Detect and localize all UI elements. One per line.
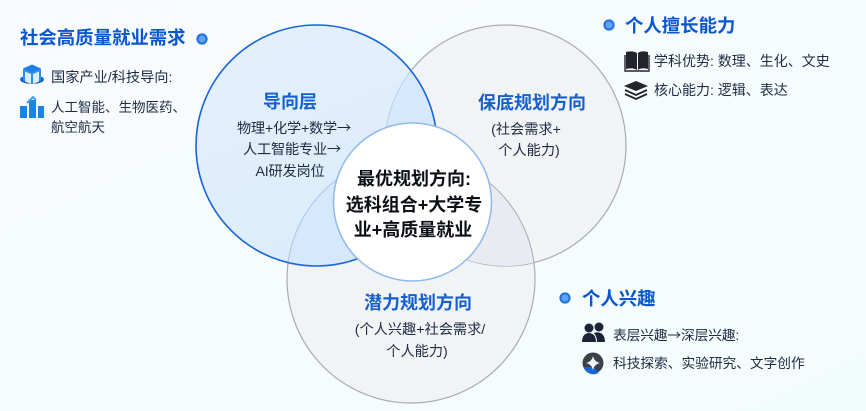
text: core abilities: 核心能力: 逻辑、表达 (654, 82, 788, 98)
text: interest areas: 科技探索、实验研究、文字创作 (613, 356, 805, 371)
heading: fallback direction: 保底规划方向 (478, 92, 586, 113)
bullet dot (604, 20, 614, 30)
text: potential direction formula: (个人兴趣+社会需求/ (355, 322, 485, 338)
text: industries: 人工智能、生物医药、 (51, 100, 186, 115)
left circle text (237, 92, 351, 180)
circle: right fallback direction (385, 25, 626, 266)
icon: stacked books (624, 81, 648, 99)
panel: personal interests (560, 288, 805, 374)
bottom circle text (355, 292, 485, 360)
icon: people (582, 322, 605, 342)
center circle text: 最优规划方向: (357, 168, 471, 189)
text: guidance layer path: 物理+化学+数学→ (237, 118, 351, 138)
heading: guidance layer: 导向层 (263, 92, 317, 112)
venn diagram (196, 25, 626, 403)
text: guidance layer path: AI研发岗位 (256, 164, 324, 180)
text: potential direction formula: 个人能力) (386, 344, 448, 360)
right circle text (478, 92, 586, 159)
text: fallback direction formula (491, 122, 561, 159)
heading: social demand: 社会高质量就业需求 (20, 27, 186, 48)
overlap: bottom and right (467, 182, 534, 266)
text: interest deepening: 表层兴趣→深层兴趣: (613, 324, 739, 344)
bullet dot (560, 293, 570, 303)
icon: sparkle badge (582, 352, 604, 374)
icon: open book (625, 51, 649, 71)
center circle text (346, 168, 482, 240)
circle: bottom potential direction (287, 155, 535, 403)
bullet dot (197, 34, 207, 44)
icon: bar chart (20, 97, 44, 118)
circle: center best direction (334, 123, 492, 281)
text: potential direction formula (355, 322, 485, 360)
icon: cube on platform (20, 64, 44, 84)
text: industry orientation: 国家产业/科技导向: (51, 69, 172, 86)
text: subject strengths: 学科优势: 数理、生化、文史 (654, 53, 830, 69)
circle: left guidance layer (196, 25, 437, 266)
outline: left guidance layer (196, 25, 437, 266)
text: industries (51, 100, 186, 135)
heading: potential direction: 潜力规划方向 (364, 292, 472, 313)
text: guidance layer path (237, 118, 351, 180)
heading: personal interests: 个人兴趣 (582, 288, 656, 309)
overlap: left and right (386, 71, 434, 127)
text: industries: 航空航天 (51, 120, 105, 135)
heading: personal strengths: 个人擅长能力 (625, 15, 735, 36)
panel: social demand (20, 27, 207, 135)
center circle text: 选科组合+大学专 (346, 194, 482, 215)
text: fallback direction formula: 个人能力) (498, 143, 560, 159)
text: fallback direction formula: (社会需求+ (491, 122, 561, 138)
overlap: bottom and left (288, 180, 336, 262)
center circle text: 业+高质量就业 (354, 219, 472, 240)
panel: personal strengths (604, 15, 830, 99)
text: guidance layer path: 人工智能专业→ (243, 139, 341, 159)
